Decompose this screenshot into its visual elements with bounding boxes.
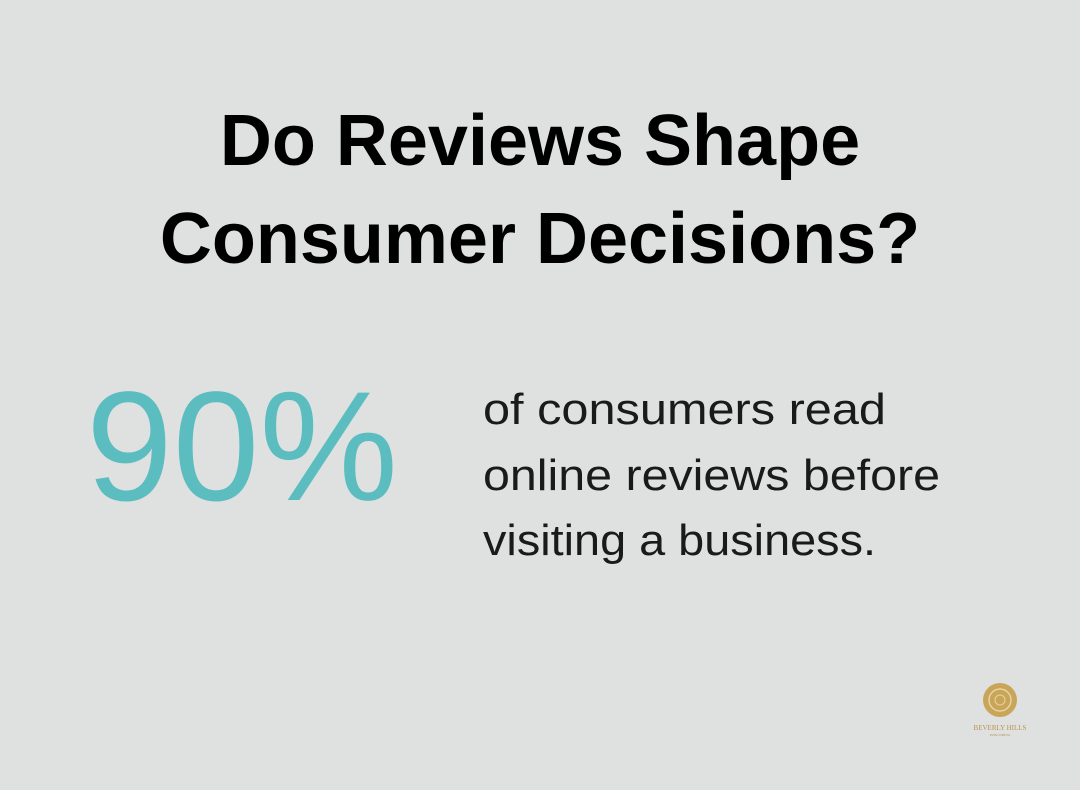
stat description: visiting a business. <box>483 516 876 565</box>
stat description <box>483 385 940 565</box>
title <box>160 101 920 279</box>
logo: Beverly Hills Publishing: BEVERLY HILLS <box>974 724 1027 732</box>
stat description: online reviews before <box>483 451 940 500</box>
logo: Beverly Hills Publishing: PUBLISHING <box>990 733 1011 737</box>
stat description: of consumers read <box>483 385 886 434</box>
title: Consumer Decisions? <box>160 199 920 279</box>
big stat: 90%: 90% <box>86 360 398 534</box>
logo: Beverly Hills Publishing <box>974 683 1027 737</box>
title: Do Reviews Shape <box>220 101 860 181</box>
